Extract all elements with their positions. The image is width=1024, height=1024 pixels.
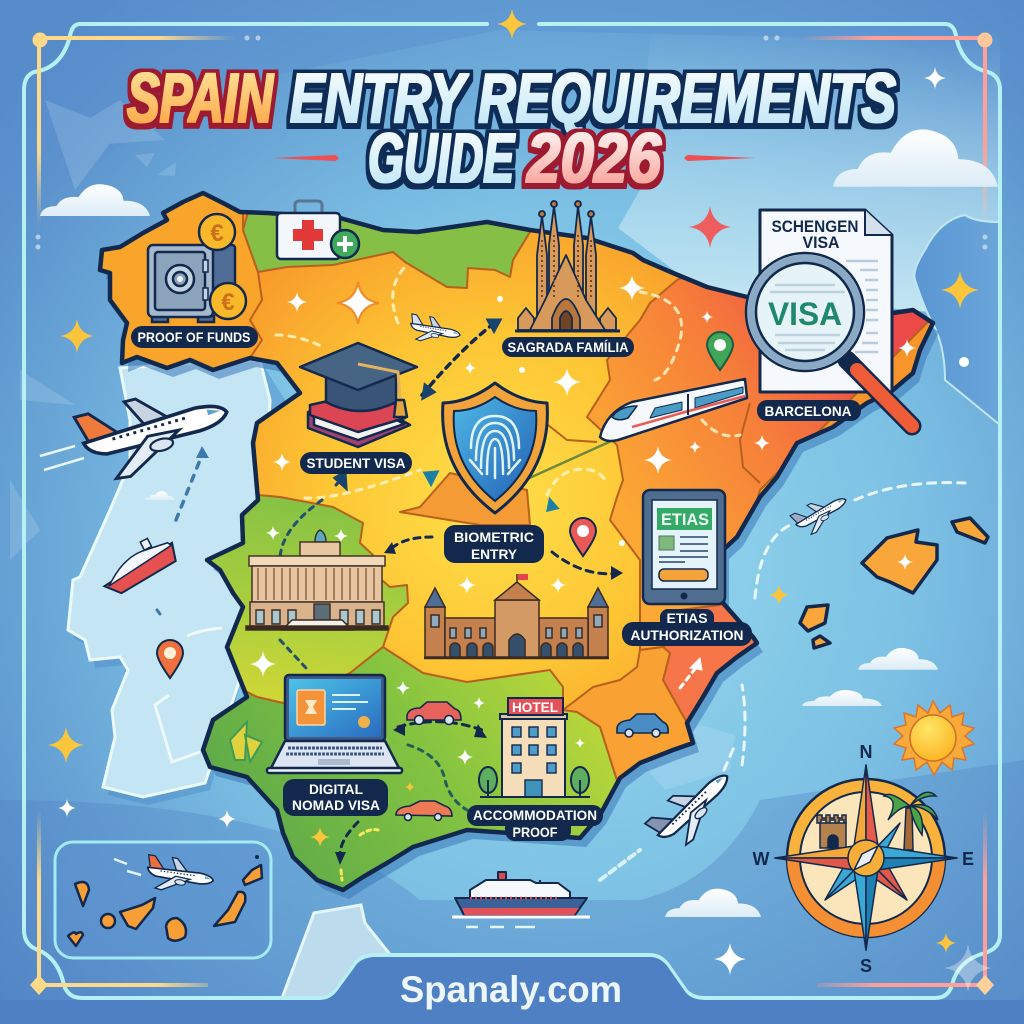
icon: Schengen visa document with magnifier: SCHENGEN (772, 217, 858, 236)
compass letters: E (962, 849, 974, 869)
compass letters (752, 742, 974, 976)
footer band (0, 957, 1024, 1024)
icon: sun (894, 701, 974, 775)
palm tree (884, 792, 938, 850)
compass star (775, 765, 957, 950)
label: Barcelona: BARCELONA (764, 403, 852, 419)
icon: Plaza de España palace (424, 574, 609, 658)
magnifier handle (847, 360, 912, 426)
Balearic Islands (800, 518, 988, 648)
region: Extremadura (200, 495, 408, 703)
label: Digital Nomad Visa (283, 779, 388, 816)
label: Sagrada Familia: SAGRADA FAMÍLIA (508, 339, 628, 355)
label: Proof of Funds: PROOF OF FUNDS (138, 329, 250, 345)
title: 2026 (525, 119, 662, 197)
compass letters: S (860, 956, 872, 976)
icon: royal palace (246, 530, 388, 630)
label: ETIAS Authorization (622, 609, 752, 646)
label: Biometric Entry: ENTRY (471, 546, 518, 562)
region: Castile under shield (400, 473, 530, 525)
icon: fingerprint shield (443, 383, 547, 513)
icon: red map pin (570, 518, 596, 556)
compass letters: N (860, 742, 872, 762)
icon: ETIAS tablet: ETIAS (661, 510, 709, 529)
icon: red cars (396, 702, 461, 820)
region: La Mancha line (548, 425, 597, 442)
region: Murcia (564, 646, 690, 778)
land: Portugal (68, 360, 285, 805)
icon: Schengen visa document with magnifier: VISA (768, 296, 842, 332)
footer brand: Spanaly.com (400, 969, 622, 1010)
label: Proof of Funds (131, 326, 258, 348)
label: Barcelona (757, 400, 861, 421)
title: GUIDE (368, 119, 516, 197)
title (127, 59, 896, 197)
label: ETIAS Authorization: AUTHORIZATION (630, 627, 744, 643)
title: SPAIN (127, 59, 274, 137)
land: Sardinia silhouette (914, 215, 1000, 425)
icon: Sagrada Familia (515, 201, 620, 331)
label: Biometric Entry (444, 525, 544, 563)
region: Asturias and Cantabria (243, 205, 530, 288)
magnifier lens (746, 253, 864, 371)
label: Student Visa: STUDENT VISA (306, 455, 406, 471)
icon: orange map pin (157, 640, 183, 678)
map of Spain (90, 185, 950, 905)
icon: Schengen visa document with magnifier: VISA (802, 233, 840, 252)
label: Accommodation Proof (467, 805, 603, 841)
icon: green map pin (707, 332, 733, 370)
region: Valencia (664, 604, 754, 720)
castle (817, 815, 846, 848)
icon: safe and coins (148, 214, 246, 322)
icon: large plane (73, 378, 236, 486)
route lines and arrows (157, 268, 965, 880)
region: Andalusia (190, 647, 620, 900)
icon: high-speed train (600, 379, 747, 441)
icon: ship on Portugal (94, 529, 182, 599)
icon: ETIAS tablet (643, 490, 725, 604)
icon: safe and coins: € (210, 220, 224, 247)
label: Biometric Entry: BIOMETRIC (454, 529, 534, 545)
region: Galicia (102, 196, 263, 366)
icon: safe and coins: € (221, 289, 235, 316)
icon: Schengen visa document with magnifier (746, 210, 912, 426)
icon: plane over Castile (407, 313, 462, 349)
label: Digital Nomad Visa: DIGITAL (309, 781, 363, 797)
icon: hotel (479, 698, 590, 797)
clouds (40, 129, 998, 917)
icon: graduation cap and books (300, 343, 417, 447)
icon: laptop (267, 675, 402, 773)
icon: small planes (790, 488, 853, 540)
plane (143, 853, 216, 898)
land: France (618, 30, 1000, 312)
region: east coast (587, 270, 950, 650)
panel: Canary Islands inset (55, 842, 271, 958)
region: Catalonia line (740, 403, 760, 483)
icon: compass (752, 742, 974, 976)
compass letters: W (752, 849, 770, 869)
icon: first aid kit (277, 201, 359, 259)
islands (68, 865, 262, 946)
label: Accommodation Proof: PROOF (512, 824, 558, 840)
label: Digital Nomad Visa: NOMAD VISA (292, 797, 380, 813)
icon: ferry (452, 872, 590, 927)
label: ETIAS Authorization: ETIAS (666, 610, 708, 626)
label: Accommodation Proof: ACCOMMODATION (473, 807, 597, 823)
label: Student Visa (300, 452, 412, 474)
icon: plant (230, 722, 262, 762)
icon: blue car (617, 714, 668, 737)
land: Africa (282, 905, 392, 998)
icon: hotel: HOTEL (512, 699, 558, 715)
